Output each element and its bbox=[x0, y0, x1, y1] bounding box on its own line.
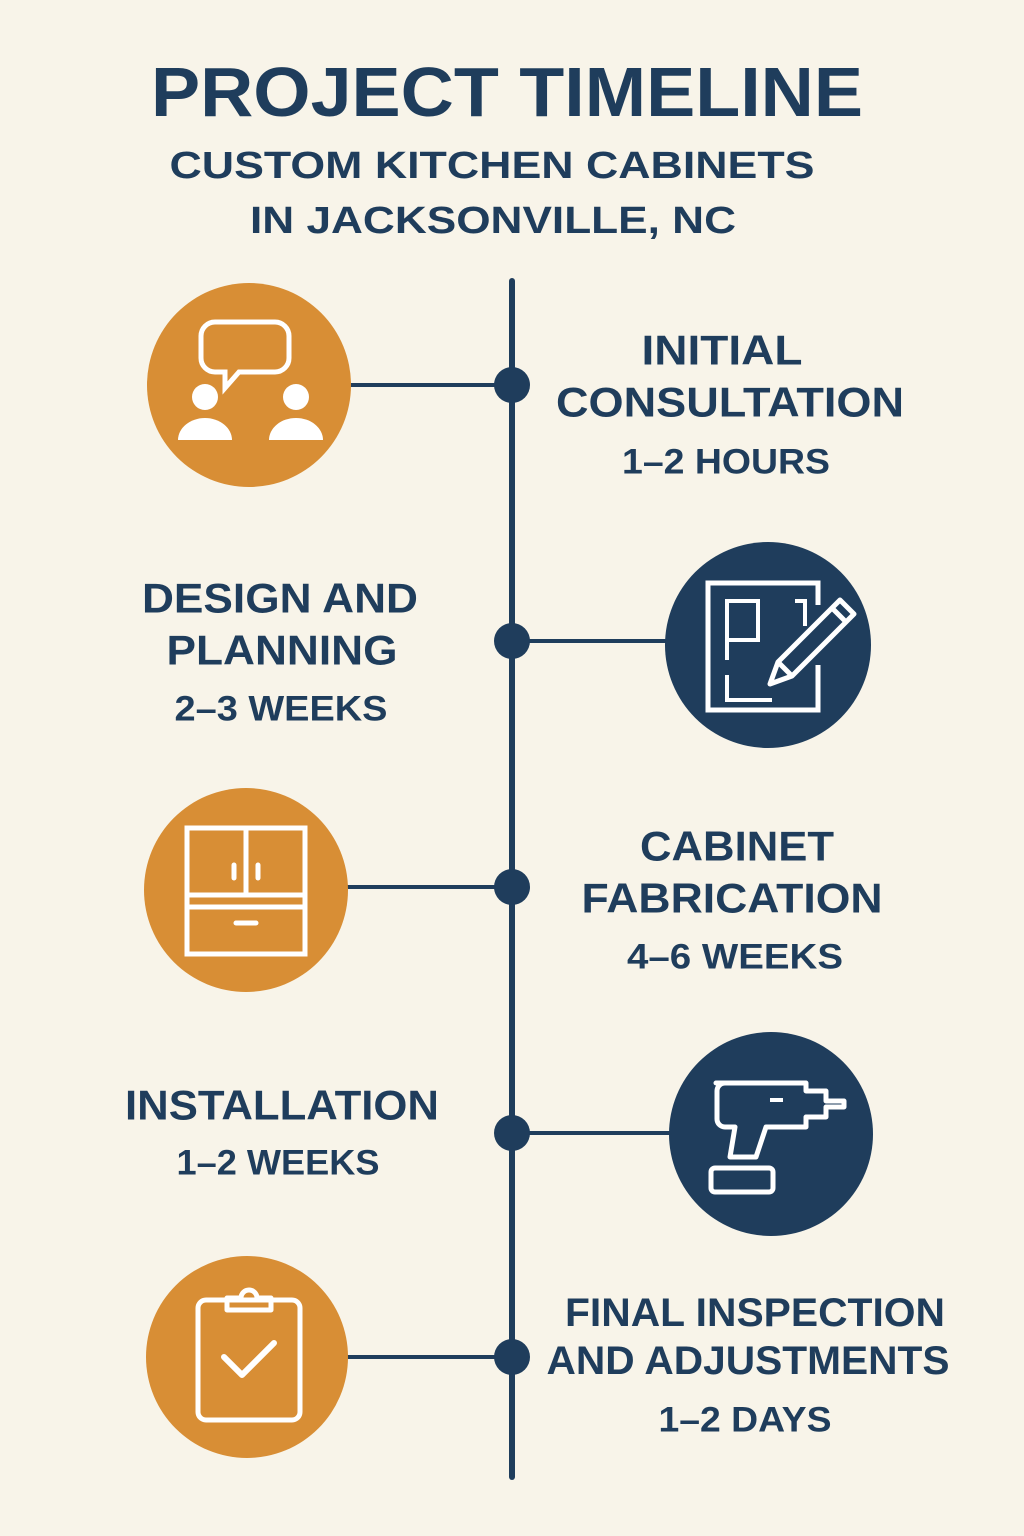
subtitle bbox=[170, 145, 814, 242]
step 5: final inspection: FINAL INSPECTION bbox=[565, 1291, 945, 1335]
step 1: initial consultation bbox=[147, 283, 904, 487]
subtitle: IN JACKSONVILLE, NC bbox=[250, 200, 736, 242]
icon: drill bbox=[669, 1032, 873, 1236]
step 2: design and planning: DESIGN AND bbox=[142, 574, 418, 622]
step 3: cabinet fabrication: FABRICATION bbox=[582, 874, 882, 922]
step 2: design and planning: 2–3 WEEKS bbox=[174, 690, 388, 728]
step 1: initial consultation: 1–2 HOURS bbox=[622, 442, 830, 482]
step 4: installation: INSTALLATION bbox=[125, 1082, 439, 1128]
step 1: initial consultation: CONSULTATION bbox=[556, 378, 904, 426]
step 4: installation bbox=[125, 1032, 873, 1236]
step 4: installation: 1–2 WEEKS bbox=[176, 1144, 380, 1182]
step 3: cabinet fabrication bbox=[144, 788, 882, 992]
step 2: design and planning bbox=[142, 542, 871, 748]
step 3: cabinet fabrication: CABINET bbox=[640, 822, 834, 870]
step 3: cabinet fabrication: 4–6 WEEKS bbox=[627, 938, 843, 976]
title: PROJECT TIMELINE bbox=[151, 53, 863, 131]
icon: consultation bbox=[147, 283, 351, 487]
step 2: design and planning: PLANNING bbox=[166, 626, 398, 674]
icon: blueprint and pencil bbox=[665, 542, 871, 748]
step 1: initial consultation: INITIAL bbox=[642, 326, 802, 374]
subtitle: CUSTOM KITCHEN CABINETS bbox=[170, 145, 814, 187]
icon: clipboard check bbox=[146, 1256, 348, 1458]
icon: cabinet bbox=[144, 788, 348, 992]
timeline axis bbox=[509, 278, 515, 1480]
step 5: final inspection: AND ADJUSTMENTS bbox=[546, 1339, 950, 1383]
step 5: final inspection bbox=[146, 1256, 950, 1458]
step 5: final inspection: 1–2 DAYS bbox=[658, 1400, 832, 1440]
